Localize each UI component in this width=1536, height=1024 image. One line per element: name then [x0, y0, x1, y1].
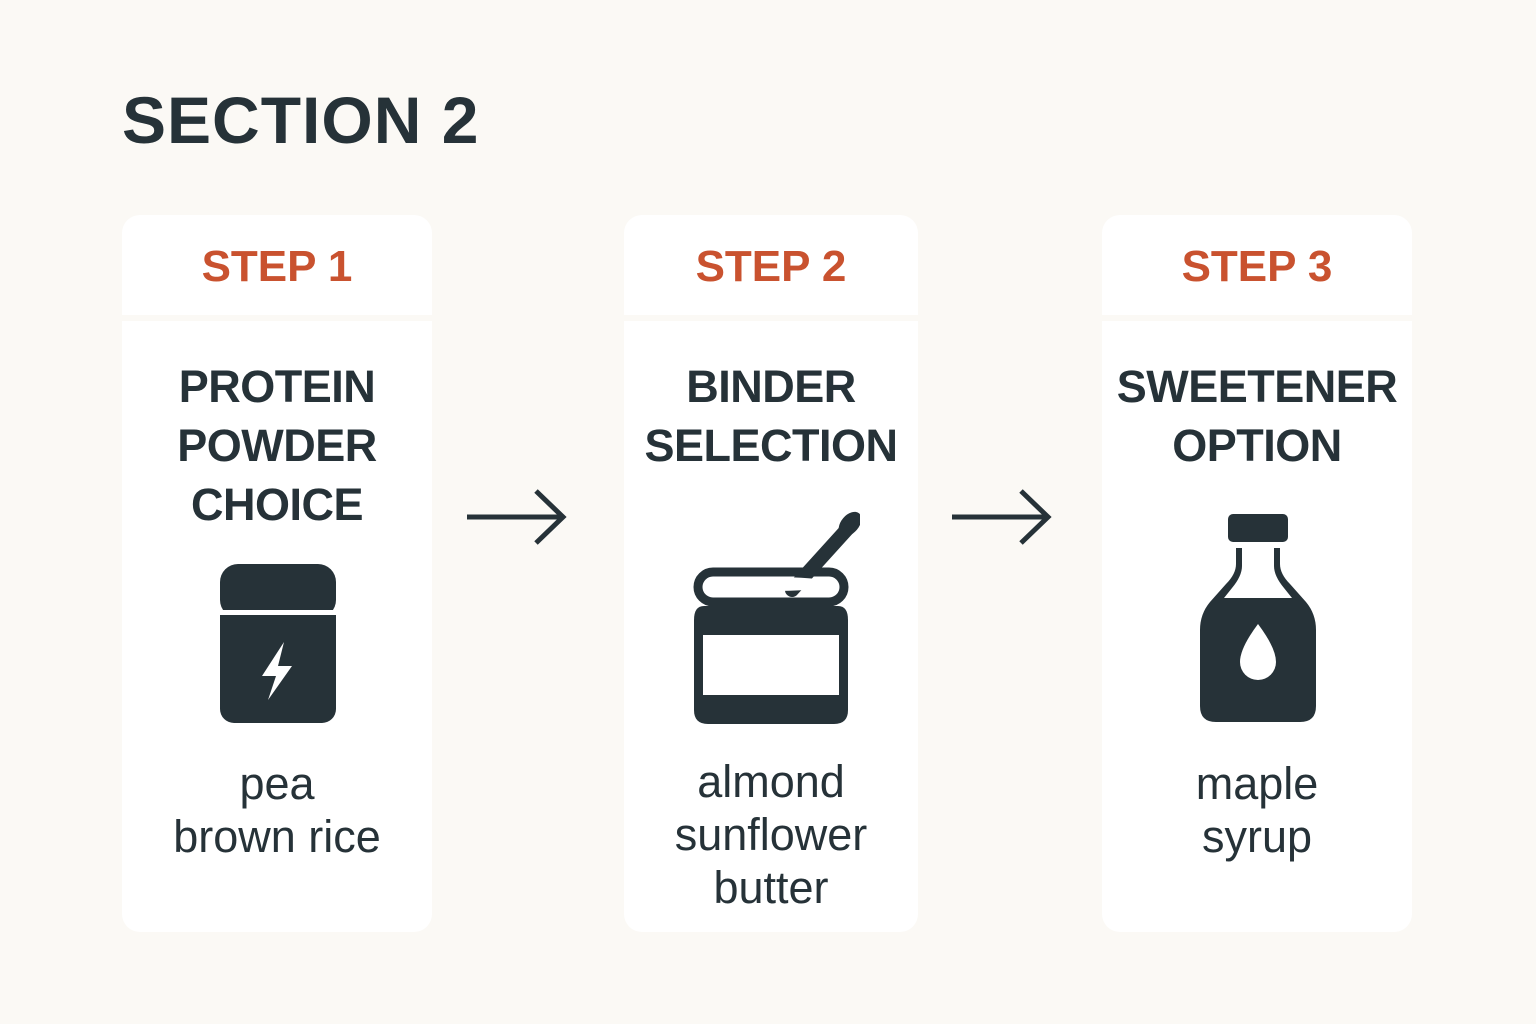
heading: binder selection: BINDER	[686, 361, 856, 412]
panel: step 1	[122, 215, 432, 932]
heading: sweetener option: OPTION	[1172, 420, 1342, 471]
text: pea brown rice	[173, 758, 381, 862]
heading: sweetener option: SWEETENER	[1117, 361, 1397, 412]
heading: protein powder choice: POWDER	[177, 420, 377, 471]
heading: sweetener option	[1117, 361, 1397, 471]
heading: protein powder choice: PROTEIN	[179, 361, 375, 412]
step 2 body	[624, 321, 918, 932]
arrow 2	[952, 489, 1052, 545]
step 3 header: STEP 3	[1182, 242, 1332, 291]
text: maple syrup: maple	[1196, 758, 1318, 809]
text: maple syrup: syrup	[1202, 811, 1312, 862]
text: pea brown rice: pea	[239, 758, 315, 809]
text: almond sunflower butter: sunflower	[675, 809, 867, 860]
step 1 header	[122, 215, 432, 315]
step 1 body	[122, 321, 432, 932]
heading: protein powder choice	[177, 361, 377, 530]
text: almond sunflower butter	[675, 756, 867, 913]
heading: protein powder choice: CHOICE	[191, 479, 363, 530]
panel: step 2	[624, 215, 918, 932]
heading: binder selection: SELECTION	[644, 420, 898, 471]
icon: protein tub	[220, 564, 336, 723]
icon: nut butter jar	[694, 512, 860, 724]
step 3 body	[1102, 321, 1412, 932]
text: almond sunflower butter: butter	[713, 862, 829, 913]
step 2 header	[624, 215, 918, 315]
text: almond sunflower butter: almond	[697, 756, 845, 807]
step 2 header: STEP 2	[696, 242, 846, 291]
title: SECTION 2	[122, 83, 479, 157]
step 3 header	[1102, 215, 1412, 315]
heading: binder selection	[644, 361, 898, 471]
step 1 header: STEP 1	[202, 242, 352, 291]
text: maple syrup	[1196, 758, 1318, 862]
text: pea brown rice: brown rice	[173, 811, 381, 862]
icon: syrup bottle	[1200, 514, 1316, 722]
panel: step 3	[1102, 215, 1412, 932]
arrow 1	[467, 489, 566, 545]
